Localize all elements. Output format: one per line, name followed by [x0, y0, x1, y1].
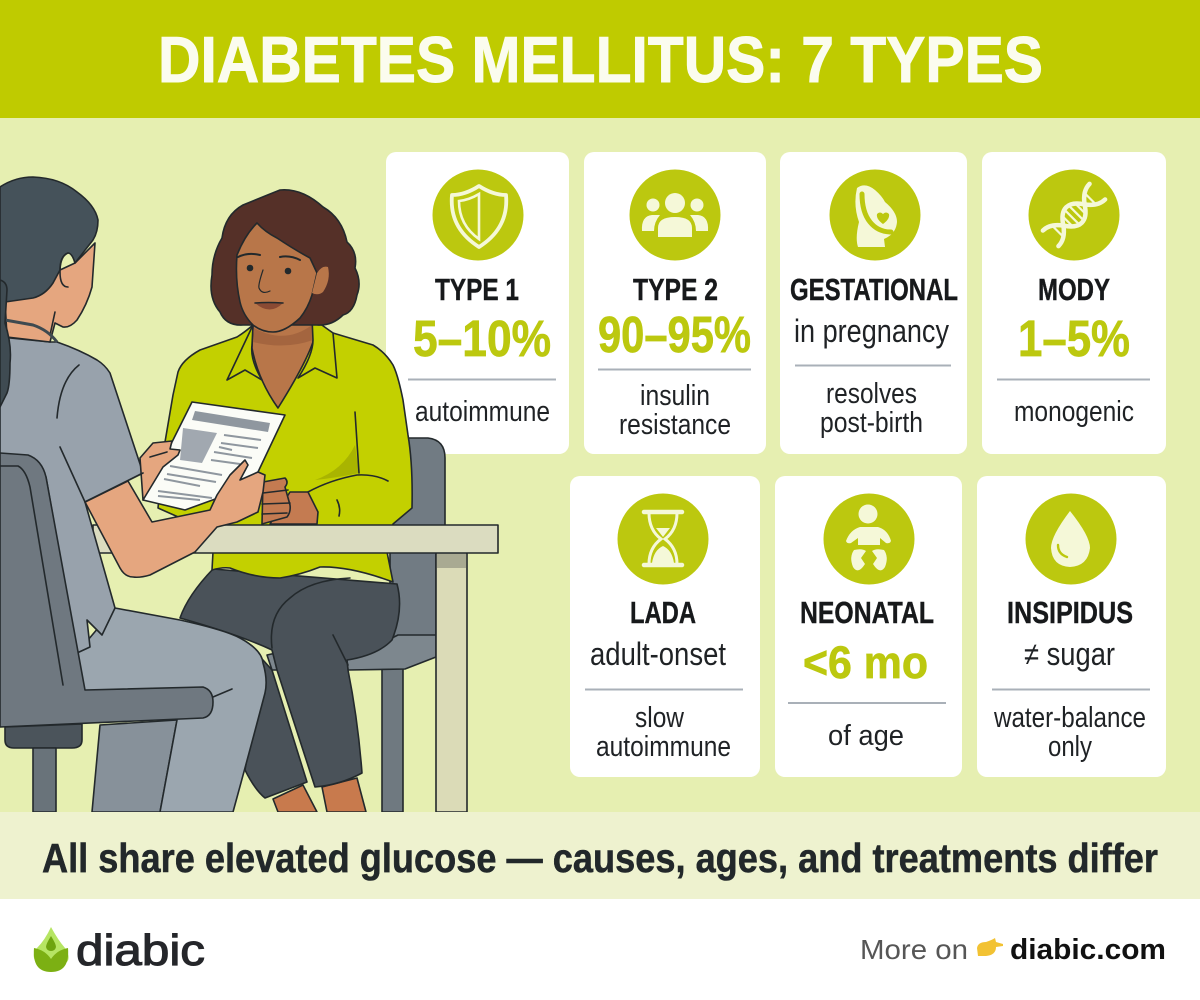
card: Gestational — [780, 152, 967, 454]
doctor hair — [0, 177, 98, 302]
card: Neonatal: <6 mo — [803, 637, 928, 688]
doctor head skin and neck — [5, 243, 95, 342]
patient features — [238, 254, 300, 310]
card: Type 2: 90–95% — [598, 306, 751, 363]
doctor scrub top — [0, 337, 143, 653]
doctor neck line — [50, 312, 55, 335]
card: Type 1: 5–10% — [413, 310, 551, 367]
card: Gestational: resolves — [826, 378, 917, 410]
patient lower legs — [273, 778, 366, 812]
patient chair — [347, 438, 445, 812]
icon: pointing hand — [977, 938, 1003, 956]
card: Insipidus: water-balance — [993, 702, 1146, 734]
patient shirt folds — [308, 412, 388, 516]
link: more on diabic.com — [860, 934, 1166, 966]
patient hair — [211, 190, 359, 325]
patient neck shadow — [253, 325, 313, 346]
card: LADA: adult-onset — [590, 636, 726, 672]
card: MODY — [982, 152, 1166, 454]
card: MODY: monogenic — [1014, 396, 1134, 428]
card: LADA: LADA — [630, 595, 696, 630]
bottom summary strip — [0, 812, 1200, 899]
patient shirt shading — [315, 445, 359, 480]
patient face — [236, 223, 317, 332]
icon: group of people — [642, 193, 708, 237]
table — [93, 525, 498, 812]
stethoscope — [5, 320, 57, 342]
card: Insipidus: ≠ sugar — [1024, 636, 1115, 672]
panel: main background — [0, 118, 1200, 812]
card: Type 2: insulin — [640, 380, 710, 412]
card: Gestational: GESTATIONAL — [790, 272, 958, 307]
card: Type 1: autoimmune — [415, 396, 550, 428]
icon: DNA helix — [1043, 184, 1105, 246]
card: Insipidus: only — [1048, 731, 1092, 763]
doctor thumb line — [150, 452, 167, 457]
doctor ear line — [60, 253, 68, 287]
patient near trouser leg — [180, 569, 400, 787]
doctor arm and right hand — [85, 460, 265, 577]
card: Neonatal: NEONATAL — [800, 595, 934, 630]
card: LADA: slow — [635, 702, 685, 734]
doctor back leg — [92, 720, 177, 812]
card: Type 2 — [584, 152, 766, 454]
patient ear — [312, 267, 329, 294]
trouser folds — [271, 578, 350, 665]
logo: diabic: diabic — [76, 926, 205, 975]
icon: shield — [452, 186, 506, 247]
footer — [34, 926, 1166, 975]
card: Neonatal — [775, 476, 962, 777]
link: more on diabic.com: diabic.com — [1010, 934, 1166, 966]
doctor chair — [0, 453, 213, 812]
patient hands — [262, 478, 318, 524]
patient shirt — [158, 320, 412, 582]
card: Neonatal: of age — [828, 720, 904, 752]
icon: hourglass — [644, 512, 682, 565]
doctor ponytail — [0, 280, 10, 407]
title: DIABETES MELLITUS: 7 TYPES — [158, 23, 1043, 96]
chair strut — [267, 653, 279, 670]
illustration: doctor and patient at table — [0, 177, 498, 812]
icon: pregnant figure — [855, 185, 897, 247]
doctor knee crease — [213, 689, 232, 697]
card: Insipidus — [977, 476, 1166, 777]
card: Insipidus: INSIPIDUS — [1007, 595, 1133, 630]
card: LADA: autoimmune — [596, 731, 731, 763]
paper — [143, 402, 285, 510]
doctor front leg — [77, 608, 266, 812]
logo: diabic — [34, 926, 205, 975]
link: more on diabic.com: More on — [860, 934, 968, 965]
doctor left hand — [140, 441, 180, 500]
card: Type 2: TYPE 2 — [633, 272, 718, 307]
patient collar — [227, 318, 337, 380]
card: Gestational: in pregnancy — [794, 313, 949, 349]
icon: baby — [846, 504, 891, 570]
card: MODY: 1–5% — [1018, 310, 1130, 367]
patient far trouser leg — [245, 660, 307, 798]
card: MODY: MODY — [1038, 272, 1110, 307]
card: Type 1: TYPE 1 — [435, 272, 519, 307]
card: Type 1 — [386, 152, 569, 454]
card: Type 2: resistance — [619, 409, 731, 441]
card: Gestational: post-birth — [820, 407, 923, 439]
scrub sleeve folds — [57, 365, 85, 502]
icon: water drop — [1051, 511, 1090, 567]
scrub hem fold — [85, 473, 143, 502]
card: LADA — [570, 476, 760, 777]
patient neck and chest — [252, 318, 313, 408]
header band — [0, 0, 1200, 118]
